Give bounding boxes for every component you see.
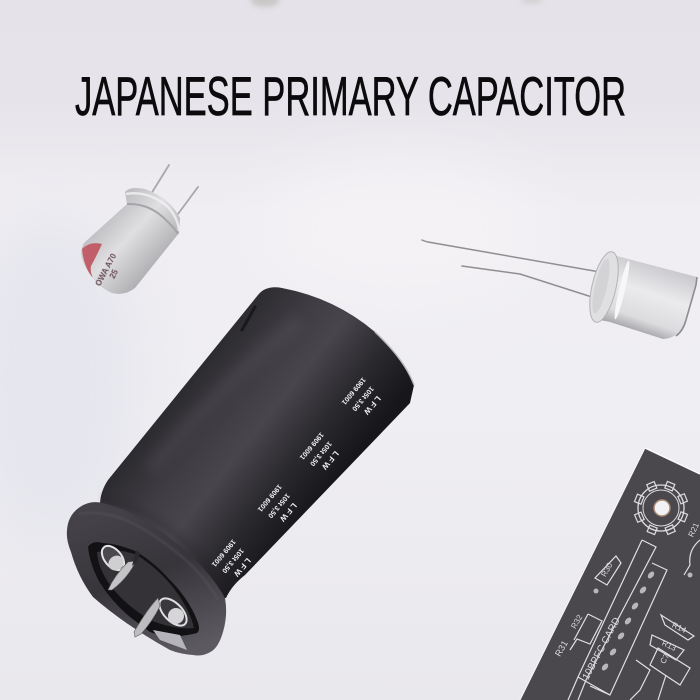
- capacitor flange: [584, 249, 624, 325]
- board silkscreen labels: 10BPFC CARD: [581, 616, 623, 682]
- capacitor leads: [422, 240, 600, 298]
- pink marking: [82, 243, 102, 278]
- capacitor print: [94, 252, 127, 292]
- capacitor print: [210, 376, 386, 584]
- capacitor print: 1909 6001: [340, 376, 367, 406]
- silver can: [600, 256, 697, 339]
- capacitor print: 105t 3,50: [350, 385, 375, 412]
- capacitor print: 1909 6001: [256, 483, 283, 513]
- capacitor print: LFW: [231, 556, 253, 580]
- capacitor print: 105t 3,50: [266, 492, 291, 519]
- capacitor print: LFW: [361, 394, 383, 418]
- board silkscreen labels: R32: [569, 613, 585, 630]
- capacitor print: LFW: [319, 449, 341, 473]
- board traces: [568, 540, 700, 700]
- board silkscreen labels: C7: [658, 652, 672, 665]
- silver can: [81, 188, 180, 294]
- board solder pads: [594, 570, 692, 672]
- board silkscreen labels: R31: [553, 639, 570, 658]
- capacitor print: OWA A70: [94, 252, 119, 288]
- board silkscreen labels: R14: [670, 621, 688, 635]
- silver tab: [153, 630, 187, 650]
- mounting hole with pad ring: [634, 481, 688, 535]
- terminal 1: [97, 542, 140, 590]
- capacitor print: 1909 6001: [298, 431, 325, 461]
- silver capacitor with long leads: [422, 240, 697, 339]
- capacitor print: 105t 3,50: [308, 440, 333, 467]
- capacitor leads: [151, 165, 198, 218]
- large black electrolytic capacitor: [67, 287, 414, 656]
- board silkscreen labels: [553, 521, 700, 682]
- circuit board: [520, 448, 700, 700]
- small silver capacitor with pink top: [81, 165, 198, 294]
- board silkscreen labels: R30: [599, 561, 615, 578]
- terminal 2: [134, 594, 191, 637]
- capacitor body: [100, 287, 414, 600]
- capacitor print: 25: [108, 268, 120, 280]
- capacitor print: LFW: [277, 501, 299, 525]
- board silkscreen labels: R13: [660, 639, 678, 653]
- capacitor print: 105t 3,50: [220, 547, 245, 574]
- capacitor flange: [67, 502, 226, 656]
- capacitor base recess: [88, 542, 199, 636]
- capacitor print: 1909 6001: [210, 538, 237, 568]
